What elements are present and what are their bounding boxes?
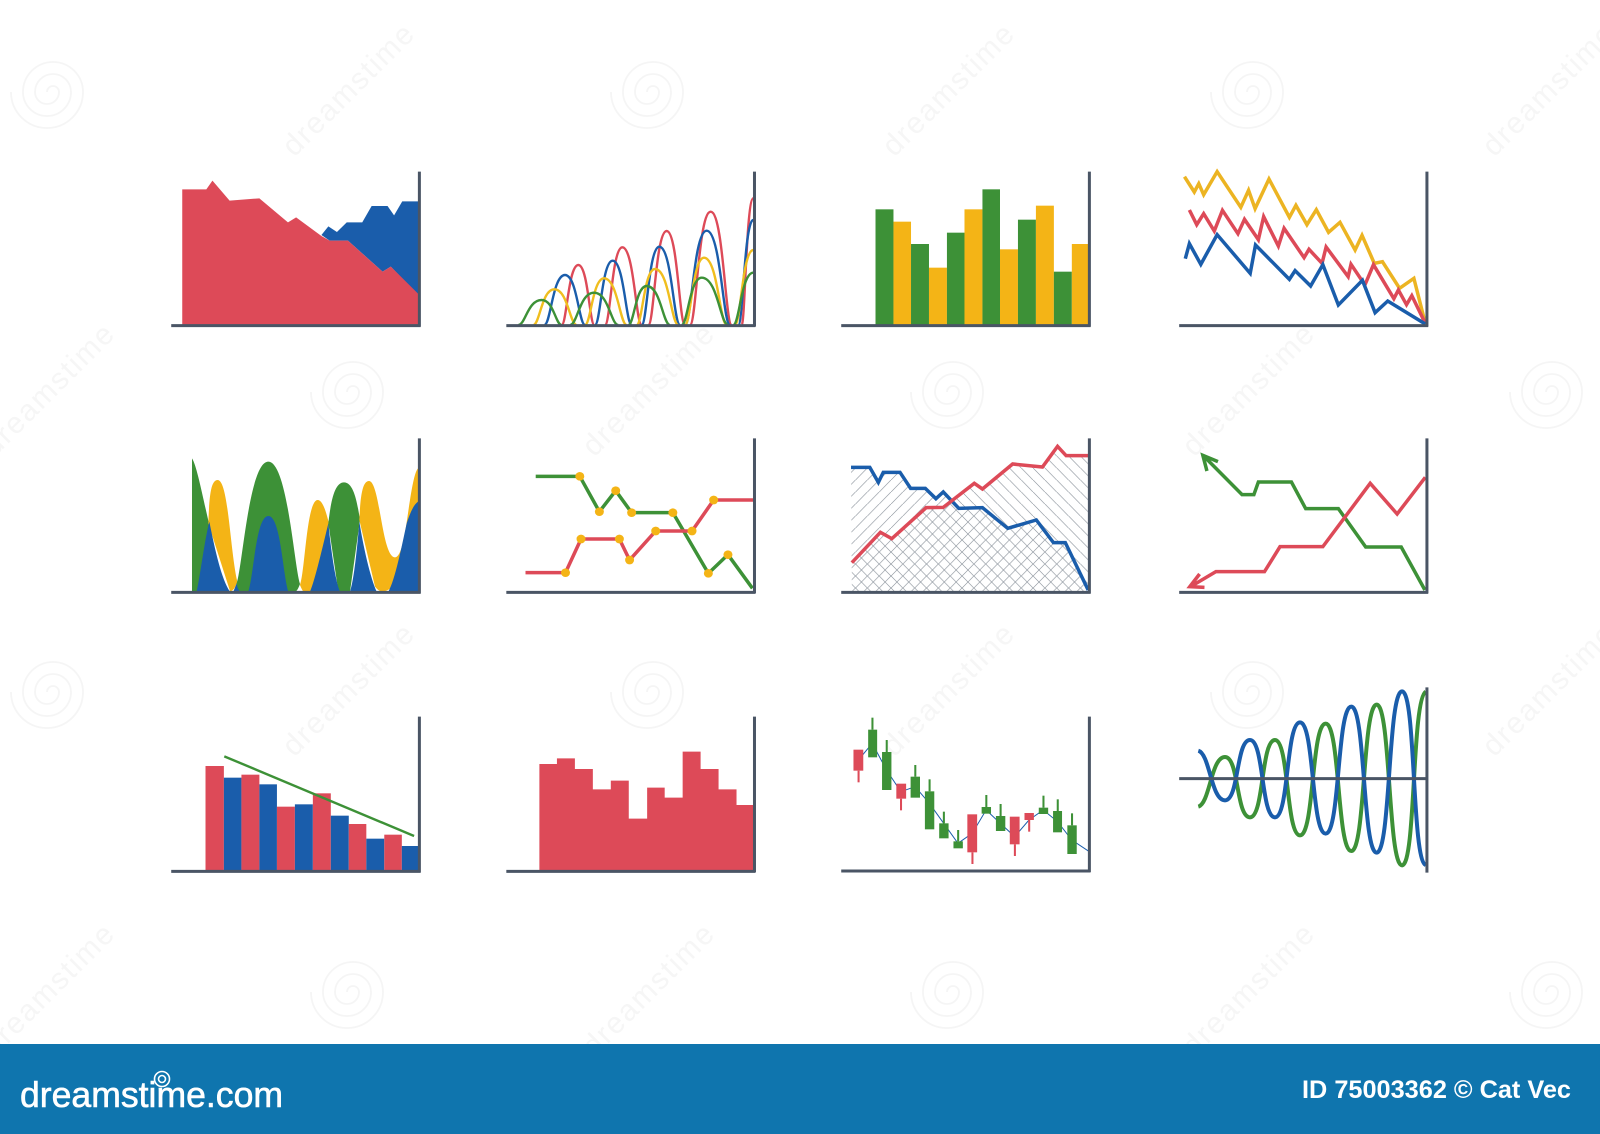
watermark spirals and wordmarks: dreamstime (876, 18, 1021, 163)
footer bar (0, 1044, 1600, 1134)
watermark spirals and wordmarks: dreamstime (576, 918, 721, 1063)
watermark spirals and wordmarks: dreamstime (876, 618, 1021, 763)
chart: red and blue bars with trend line (171, 717, 421, 872)
chart: candlesticks (841, 717, 1091, 872)
image id and credit: ID 75003362 © Cat Vec (1302, 1076, 1571, 1104)
logo wordmark: dreamstime.com (20, 1074, 283, 1115)
watermark spirals and wordmarks: dreamstime (1176, 918, 1321, 1063)
chart: overlapping area red and blue (171, 172, 421, 327)
chart: layered wave areas (171, 438, 421, 593)
chart: growing wave curves (506, 172, 755, 327)
icon: logo spiral (154, 1072, 170, 1086)
watermark spirals and wordmarks: dreamstime (276, 618, 421, 763)
watermark spirals and wordmarks: dreamstime (1176, 318, 1321, 463)
watermark spirals and wordmarks: dreamstime (576, 318, 721, 463)
chart: green and yellow bars (841, 172, 1091, 327)
chart: two lines with yellow markers (506, 438, 755, 593)
chart: hatched crossing areas (841, 438, 1091, 593)
watermark spirals and wordmarks: dreamstime (276, 18, 421, 163)
chart: three falling zigzag lines (1179, 172, 1428, 327)
chart: crossing arrows (1179, 438, 1428, 593)
chart: red histogram (506, 717, 755, 872)
chart: expanding sine waves (1179, 687, 1427, 873)
